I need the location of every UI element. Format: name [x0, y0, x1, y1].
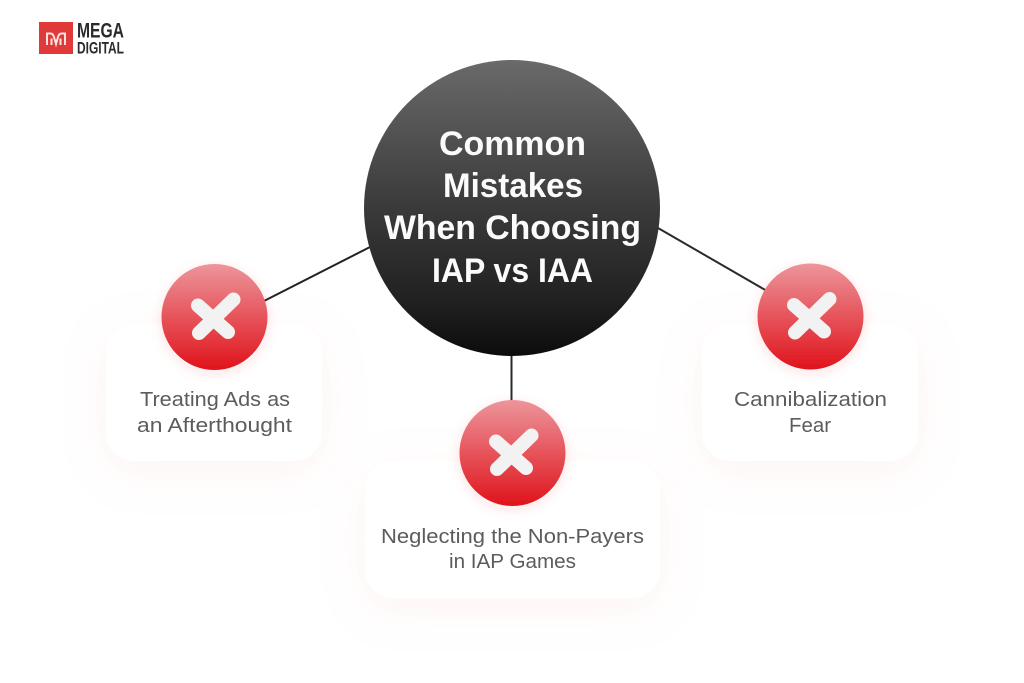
title: IAP vs IAA	[432, 252, 593, 290]
label: an Afterthought	[137, 415, 292, 437]
logo: Mega Digital: DIGITAL	[77, 38, 124, 58]
hub circle with title	[364, 60, 660, 356]
title: When Choosing	[384, 209, 641, 247]
panel: Cannibalization Fear	[702, 264, 918, 461]
title: Common	[439, 125, 586, 163]
logo: Mega Digital	[39, 20, 124, 58]
connector: hub to right item	[658, 228, 767, 291]
label: Fear	[789, 415, 831, 437]
label: Cannibalization	[734, 389, 887, 411]
panel: Treating Ads as an Afterthought	[106, 264, 322, 461]
icon: red cross	[162, 264, 268, 370]
icon: red cross	[460, 400, 566, 506]
label: Treating Ads as	[140, 389, 290, 411]
logo: Mega Digital: MEGA	[77, 20, 124, 42]
connector: hub to middle item	[510, 354, 512, 402]
label: in IAP Games	[449, 551, 576, 573]
icon: red cross	[758, 264, 864, 370]
title: Mistakes	[443, 167, 583, 205]
panel: Neglecting the Non-Payers in IAP Games	[365, 400, 660, 598]
connector: hub to left item	[264, 246, 372, 301]
label: Neglecting the Non-Payers	[381, 526, 644, 548]
